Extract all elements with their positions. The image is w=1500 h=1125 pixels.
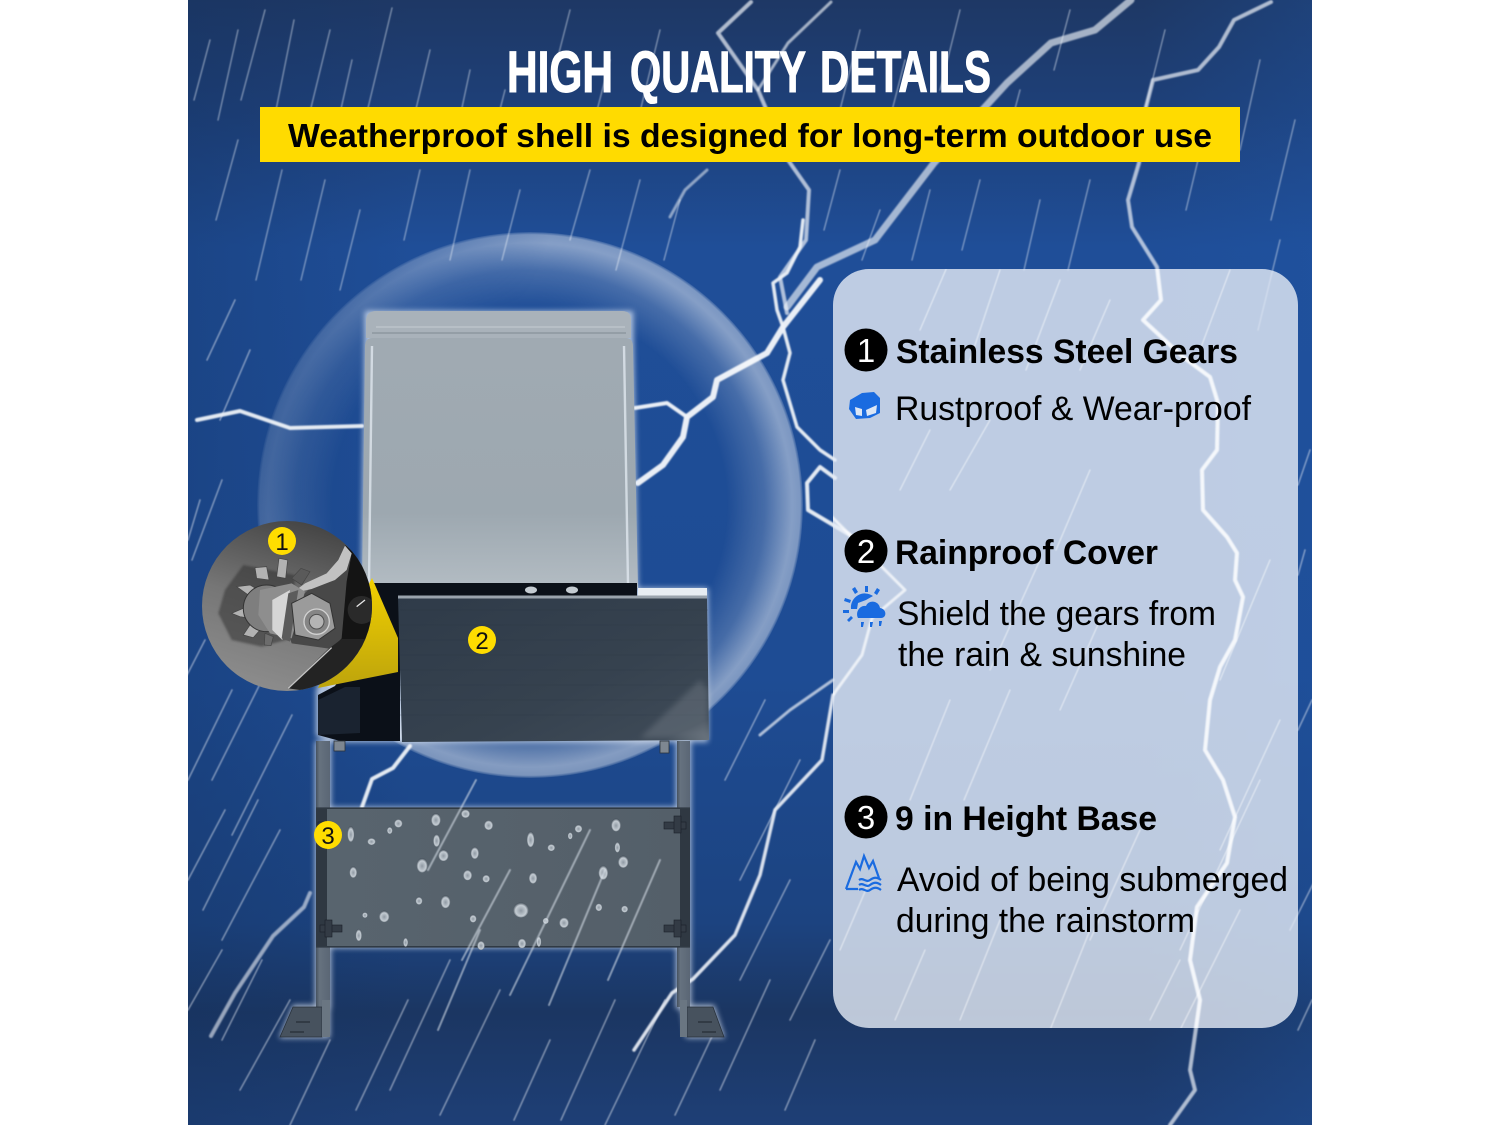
icon: shield box — [849, 392, 880, 419]
hub — [258, 583, 305, 638]
detail lens: stainless steel gear — [202, 521, 382, 692]
feature 2: rainproof cover: the rain & sunshine — [898, 636, 1186, 674]
feature 1: stainless steel gears: Stainless Steel Gears — [896, 333, 1238, 371]
title: HIGH — [507, 40, 613, 105]
gate opener machine — [279, 311, 725, 1038]
rain seen through panel — [840, 260, 1280, 1030]
feature 1: stainless steel gears: Rustproof & Wear-proof — [895, 390, 1252, 428]
yellow marker 1 — [268, 527, 296, 556]
feature 3: height base: 9 in Height Base — [895, 800, 1157, 838]
rain streaks — [187, 8, 1320, 1125]
bolts on base plate — [318, 816, 686, 937]
machine glow — [279, 311, 725, 1038]
lower dark plate — [289, 639, 366, 690]
background: stormy blue sky — [187, 0, 1320, 1125]
gear shadow — [218, 565, 295, 647]
rear lower legs and feet — [280, 741, 724, 1037]
feature 3: height base: 3 — [857, 799, 875, 836]
icon: mountain and flood waves — [846, 856, 881, 891]
weatherproof cover — [362, 311, 638, 588]
yellow marker 3: 3 — [321, 823, 335, 850]
feature 3: height base: during the rainstorm — [896, 902, 1195, 940]
feature 3: height base: Avoid of being submerged — [897, 861, 1288, 899]
black rear section — [339, 545, 372, 648]
subtitle banner — [260, 107, 1240, 162]
title — [507, 40, 991, 105]
feature 2: rainproof cover — [843, 530, 1216, 674]
feature 2: rainproof cover: 2 — [857, 533, 875, 570]
sprocket teeth — [232, 558, 310, 646]
yellow marker 3 — [314, 821, 342, 850]
water droplets — [347, 809, 628, 950]
lightning bolts — [197, 0, 1271, 1125]
title: DETAILS — [820, 40, 991, 105]
front cover plate — [398, 586, 709, 742]
yellow marker 2: 2 — [475, 628, 489, 655]
hex nut and bolt — [292, 593, 335, 640]
feature 2: rainproof cover: Shield the gears from — [897, 595, 1216, 633]
panel: features — [820, 260, 1298, 1070]
yellow marker 1: 1 — [275, 529, 289, 556]
rain over base plate — [428, 780, 660, 1030]
glass sphere — [257, 232, 803, 778]
subtitle banner: Weatherproof shell is designed for long-term outdoor use — [288, 117, 1212, 154]
lightning seen through panel — [820, 267, 1243, 1070]
black motor housing — [318, 583, 707, 741]
base plate — [316, 808, 690, 950]
title: QUALITY — [630, 40, 806, 105]
infographic canvas — [188, 0, 1312, 1125]
feature 3: height base — [844, 796, 1288, 940]
bracket — [290, 551, 352, 648]
yellow magnifier cone — [318, 578, 398, 688]
feature 1: stainless steel gears: 1 — [857, 332, 875, 369]
feature 2: rainproof cover: Rainproof Cover — [895, 534, 1158, 572]
bolts under housing — [334, 741, 669, 753]
icon: sun and rain cloud — [843, 586, 885, 627]
feature 1: stainless steel gears — [844, 328, 1252, 428]
yellow marker 2 — [468, 626, 496, 655]
